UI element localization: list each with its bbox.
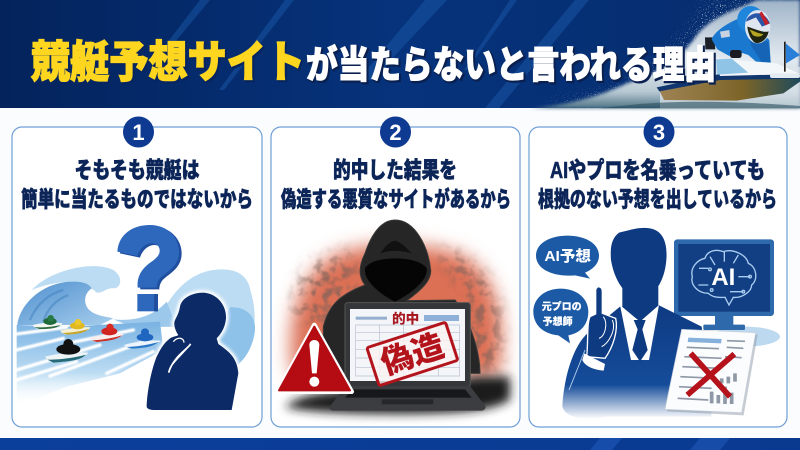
title: 競艇予想サイト bbox=[32, 40, 306, 88]
panel 2: forged results bbox=[271, 116, 520, 427]
title: が当たらないと言われる理由 bbox=[306, 44, 716, 87]
footer band bbox=[0, 438, 800, 450]
brain icon bbox=[692, 250, 756, 305]
title bbox=[31, 38, 718, 88]
badge 3: 3 bbox=[653, 120, 665, 145]
speech bubble: former pro tipster: 元プロの bbox=[542, 301, 582, 313]
heading 1 bbox=[21, 158, 253, 212]
red smoke background bbox=[291, 245, 502, 377]
rider bbox=[705, 6, 771, 63]
title: が当たらないと言われる理由 bbox=[308, 46, 718, 88]
heading 1: 簡単に当たるものではないから bbox=[21, 187, 253, 212]
header banner bbox=[0, 0, 800, 108]
hooded figure bbox=[323, 220, 480, 373]
panel 1: racing is hard to predict bbox=[12, 116, 262, 427]
boats bbox=[33, 315, 161, 363]
heading 2: 偽造する悪質なサイトがあるから bbox=[281, 187, 511, 212]
suited man bbox=[562, 228, 712, 419]
photo: racing boat and rider bbox=[530, 0, 800, 108]
laptop bbox=[330, 303, 486, 411]
illustration: hooded figure with laptop bbox=[278, 220, 510, 414]
wave bbox=[17, 266, 255, 407]
badge 3 bbox=[644, 116, 674, 148]
speech bubble: former pro tipster: 予想師 bbox=[543, 315, 573, 328]
laptop: 的中 bbox=[392, 310, 419, 326]
badge 2: 2 bbox=[389, 120, 402, 145]
badge 1: 1 bbox=[132, 120, 145, 145]
boat hull bbox=[657, 42, 800, 101]
title: 競艇予想サイト bbox=[31, 38, 305, 87]
heading 2 bbox=[281, 158, 511, 212]
report with red cross bbox=[665, 329, 758, 415]
illustration: suited man, AI monitor and rejected report bbox=[533, 228, 780, 419]
panel 3: AI and pro claims bbox=[529, 116, 787, 427]
raised finger hand bbox=[582, 287, 616, 371]
badge 2 bbox=[380, 116, 411, 148]
question mark bbox=[117, 225, 182, 311]
stamp: forged bbox=[367, 322, 458, 386]
dark table bbox=[285, 377, 510, 414]
AI monitor: AI bbox=[711, 264, 735, 291]
speech bubble: former pro tipster bbox=[533, 289, 588, 343]
speech bubble: AI forecast bbox=[536, 236, 599, 279]
warning triangle bbox=[278, 325, 352, 392]
heading 1: そもそも競艇は bbox=[74, 158, 200, 183]
speech bubble: AI forecast: AI予想 bbox=[544, 247, 591, 265]
AI monitor bbox=[674, 239, 780, 347]
badge 1 bbox=[123, 116, 154, 148]
illustration: waves, boats and thinking person bbox=[17, 225, 255, 410]
stamp: forged: 偽造 bbox=[376, 327, 448, 381]
heading 3 bbox=[538, 157, 777, 212]
heading 2: 的中した結果を bbox=[333, 158, 457, 183]
thinking person silhouette bbox=[147, 293, 238, 410]
